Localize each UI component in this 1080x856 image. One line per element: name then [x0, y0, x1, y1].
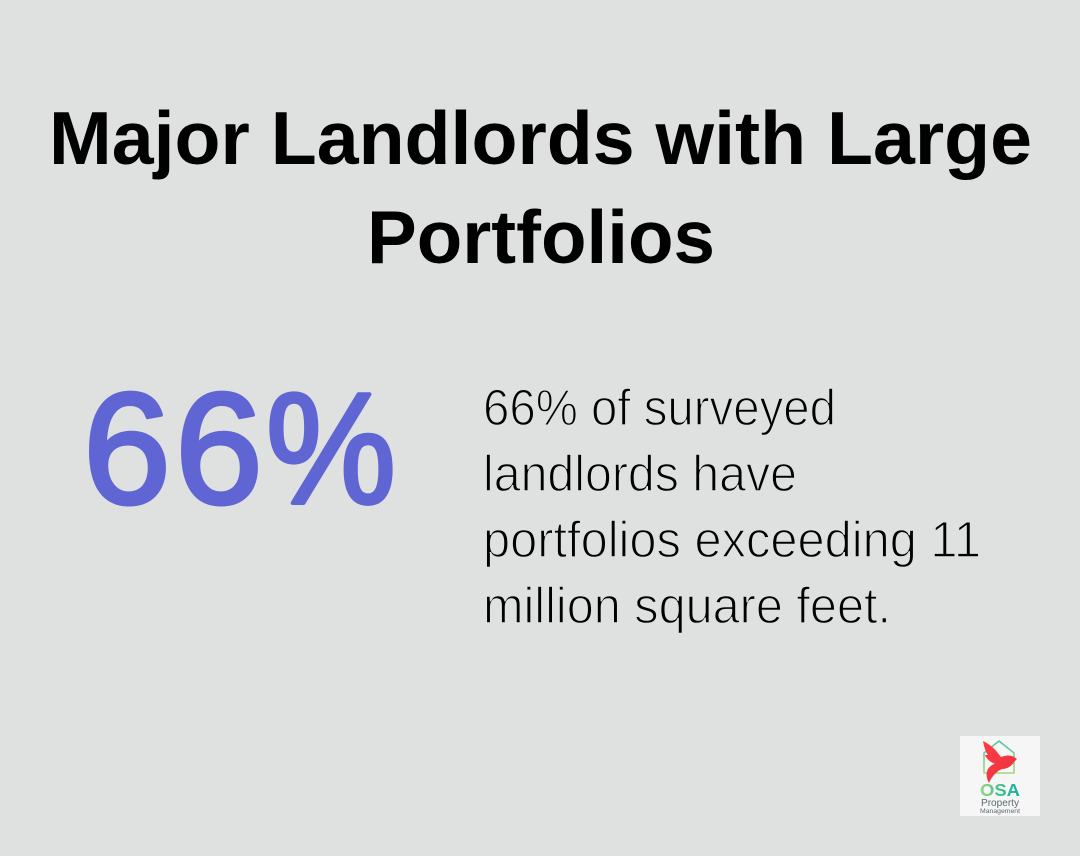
- description text: landlords have: [483, 445, 797, 502]
- description text: portfolios exceeding 11: [483, 511, 981, 568]
- description text: [483, 379, 981, 634]
- icon: house outline: [984, 741, 1014, 773]
- description text: 66% of surveyed: [483, 379, 836, 436]
- logo subtitle: Property: [981, 798, 1019, 809]
- big stat: 66%: [83, 361, 396, 537]
- logo: OSA Property Management: [960, 736, 1040, 816]
- title: [49, 96, 1032, 279]
- title: Portfolios: [367, 195, 715, 279]
- big stat: 66%: %: [266, 361, 396, 537]
- logo small subtitle: Management: [980, 809, 1020, 815]
- big stat: 66%: 66: [83, 361, 263, 537]
- description text: million square feet.: [483, 577, 891, 634]
- title: Major Landlords with Large: [49, 96, 1032, 180]
- logo wordmark: OSA: [980, 780, 1020, 800]
- icon: red bird: [983, 741, 1017, 783]
